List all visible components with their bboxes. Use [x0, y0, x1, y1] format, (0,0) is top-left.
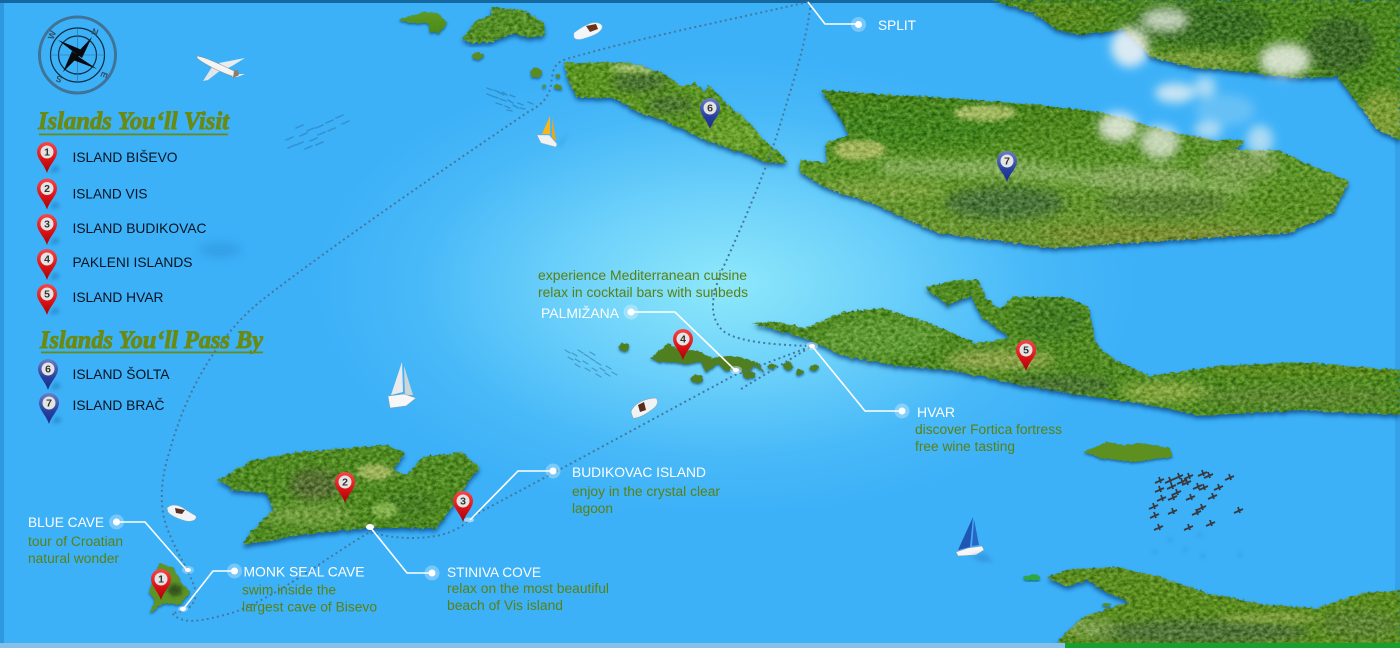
map pin 6: 6	[707, 102, 713, 114]
callout: Blue Cave: BLUE CAVE	[28, 514, 104, 530]
list: islands passed by	[38, 359, 170, 424]
compass rose: S	[54, 73, 64, 85]
callout: Stiniva Cove: STINIVA COVE	[447, 564, 541, 580]
Pakleni islands	[619, 343, 819, 383]
callout: Palmižana: relax in cocktail bars with sunbeds	[538, 285, 748, 300]
label 7: ISLAND BRAČ	[72, 397, 164, 413]
map pin 5	[1016, 340, 1036, 371]
callout: Blue Cave	[28, 514, 194, 574]
compass rose: N	[90, 26, 100, 38]
island south of Hvar	[1083, 442, 1172, 462]
callout: Stiniva Cove: relax on the most beautiful	[447, 581, 609, 596]
bird flock	[1149, 470, 1243, 530]
map pin 1	[151, 569, 171, 600]
callout: Monk Seal Cave: MONK SEAL CAVE	[244, 564, 364, 580]
bird shadows	[1152, 532, 1243, 559]
callout: Stiniva Cove	[366, 524, 609, 613]
map pin 7: 7	[1004, 156, 1010, 168]
legend pin 3	[37, 214, 60, 245]
callout: Palmižana	[538, 268, 748, 374]
map pin 6	[700, 98, 720, 129]
island: mainland north	[992, 0, 1400, 145]
callout: Budikovac Island: BUDIKOVAC ISLAND	[572, 464, 706, 480]
clouds	[1098, 8, 1311, 159]
heading: islands you'll visit: Islands You‘ll Visit	[37, 108, 230, 135]
callout: Hvar: discover Fortica fortress	[915, 422, 1062, 437]
boat centre	[631, 398, 658, 418]
islet at foot of mainland	[1102, 603, 1110, 607]
heading: islands you'll pass by: Islands You‘ll Pass By	[39, 327, 264, 354]
white sailboat	[388, 362, 416, 408]
legend pin 7: 7	[46, 398, 52, 410]
callout: Blue Cave: natural wonder	[28, 551, 120, 566]
small islets near Šolta	[472, 52, 562, 90]
legend pin 4	[37, 249, 60, 280]
legend pin 2: 2	[44, 183, 50, 195]
callout: Hvar: HVAR	[917, 404, 955, 420]
map pin 3	[453, 491, 473, 522]
map pin 3: 3	[460, 496, 466, 508]
legend pin 2	[37, 178, 60, 210]
legend pin 1: 1	[44, 146, 50, 158]
island: mainland south	[1046, 566, 1400, 643]
boat west	[167, 505, 196, 521]
compass rose: E	[98, 70, 110, 80]
callout: Stiniva Cove: beach of Vis island	[447, 598, 563, 613]
callout: Palmižana: experience Mediterranean cuisine	[538, 268, 747, 283]
yellow sailboat	[537, 116, 568, 147]
fish school west	[286, 115, 349, 149]
legend pin 1	[37, 142, 60, 173]
blue sailboat	[956, 517, 994, 562]
fish school Pakleni	[565, 350, 617, 377]
bottom strip	[0, 643, 1400, 648]
legend pin 3: 3	[44, 218, 50, 230]
island: Hvar	[745, 275, 1400, 420]
callout: Split: SPLIT	[878, 17, 916, 33]
fish school north	[487, 88, 533, 111]
island: Vis	[210, 440, 490, 550]
compass rose: W	[46, 29, 58, 41]
callout: Monk Seal Cave: swim inside the	[242, 582, 336, 598]
island: northern islet east	[462, 7, 545, 43]
island: Biševo	[148, 563, 192, 615]
callout: Monk Seal Cave: largest cave of Bisevo	[242, 600, 377, 614]
callout: Hvar: free wine tasting	[915, 439, 1015, 454]
label 4: PAKLENI ISLANDS	[72, 254, 192, 270]
small bright islet	[1023, 574, 1040, 580]
legend pin 5: 5	[44, 288, 50, 300]
airplane	[197, 56, 245, 81]
callout: Blue Cave: tour of Croatian	[28, 534, 123, 549]
callout: Budikovac Island: enjoy in the crystal clear	[572, 484, 721, 499]
compass rose	[40, 17, 116, 93]
map pin 2	[335, 472, 355, 503]
map pin 7	[997, 151, 1017, 182]
label 1: ISLAND BIŠEVO	[72, 149, 178, 165]
callout: Palmižana: PALMIŽANA	[541, 305, 620, 321]
map pin 1: 1	[158, 574, 164, 586]
legend pin 5	[37, 284, 60, 315]
label 6: ISLAND ŠOLTA	[72, 366, 170, 382]
legend pin 6: 6	[45, 364, 51, 376]
callout: Split	[808, 2, 916, 33]
island: Brač	[790, 85, 1360, 255]
callout: Budikovac Island	[464, 464, 721, 522]
callout: Budikovac Island: lagoon	[572, 501, 613, 516]
map pin 5: 5	[1023, 344, 1029, 356]
map pin 4: 4	[680, 334, 686, 346]
dotted boat route	[162, 2, 812, 621]
callout: Monk Seal Cave	[178, 564, 377, 614]
map pin 4	[673, 329, 693, 360]
map pin 2: 2	[342, 476, 348, 488]
island: Šolta	[562, 61, 788, 170]
list: islands to visit	[37, 142, 206, 315]
island: northern islet west	[398, 12, 447, 33]
label 3: ISLAND BUDIKOVAC	[72, 220, 206, 236]
label 2: ISLAND VIS	[72, 186, 148, 202]
boat north	[574, 23, 602, 39]
callout: Hvar	[806, 342, 1062, 454]
legend pin 4: 4	[44, 254, 50, 266]
label 5: ISLAND HVAR	[72, 289, 164, 305]
